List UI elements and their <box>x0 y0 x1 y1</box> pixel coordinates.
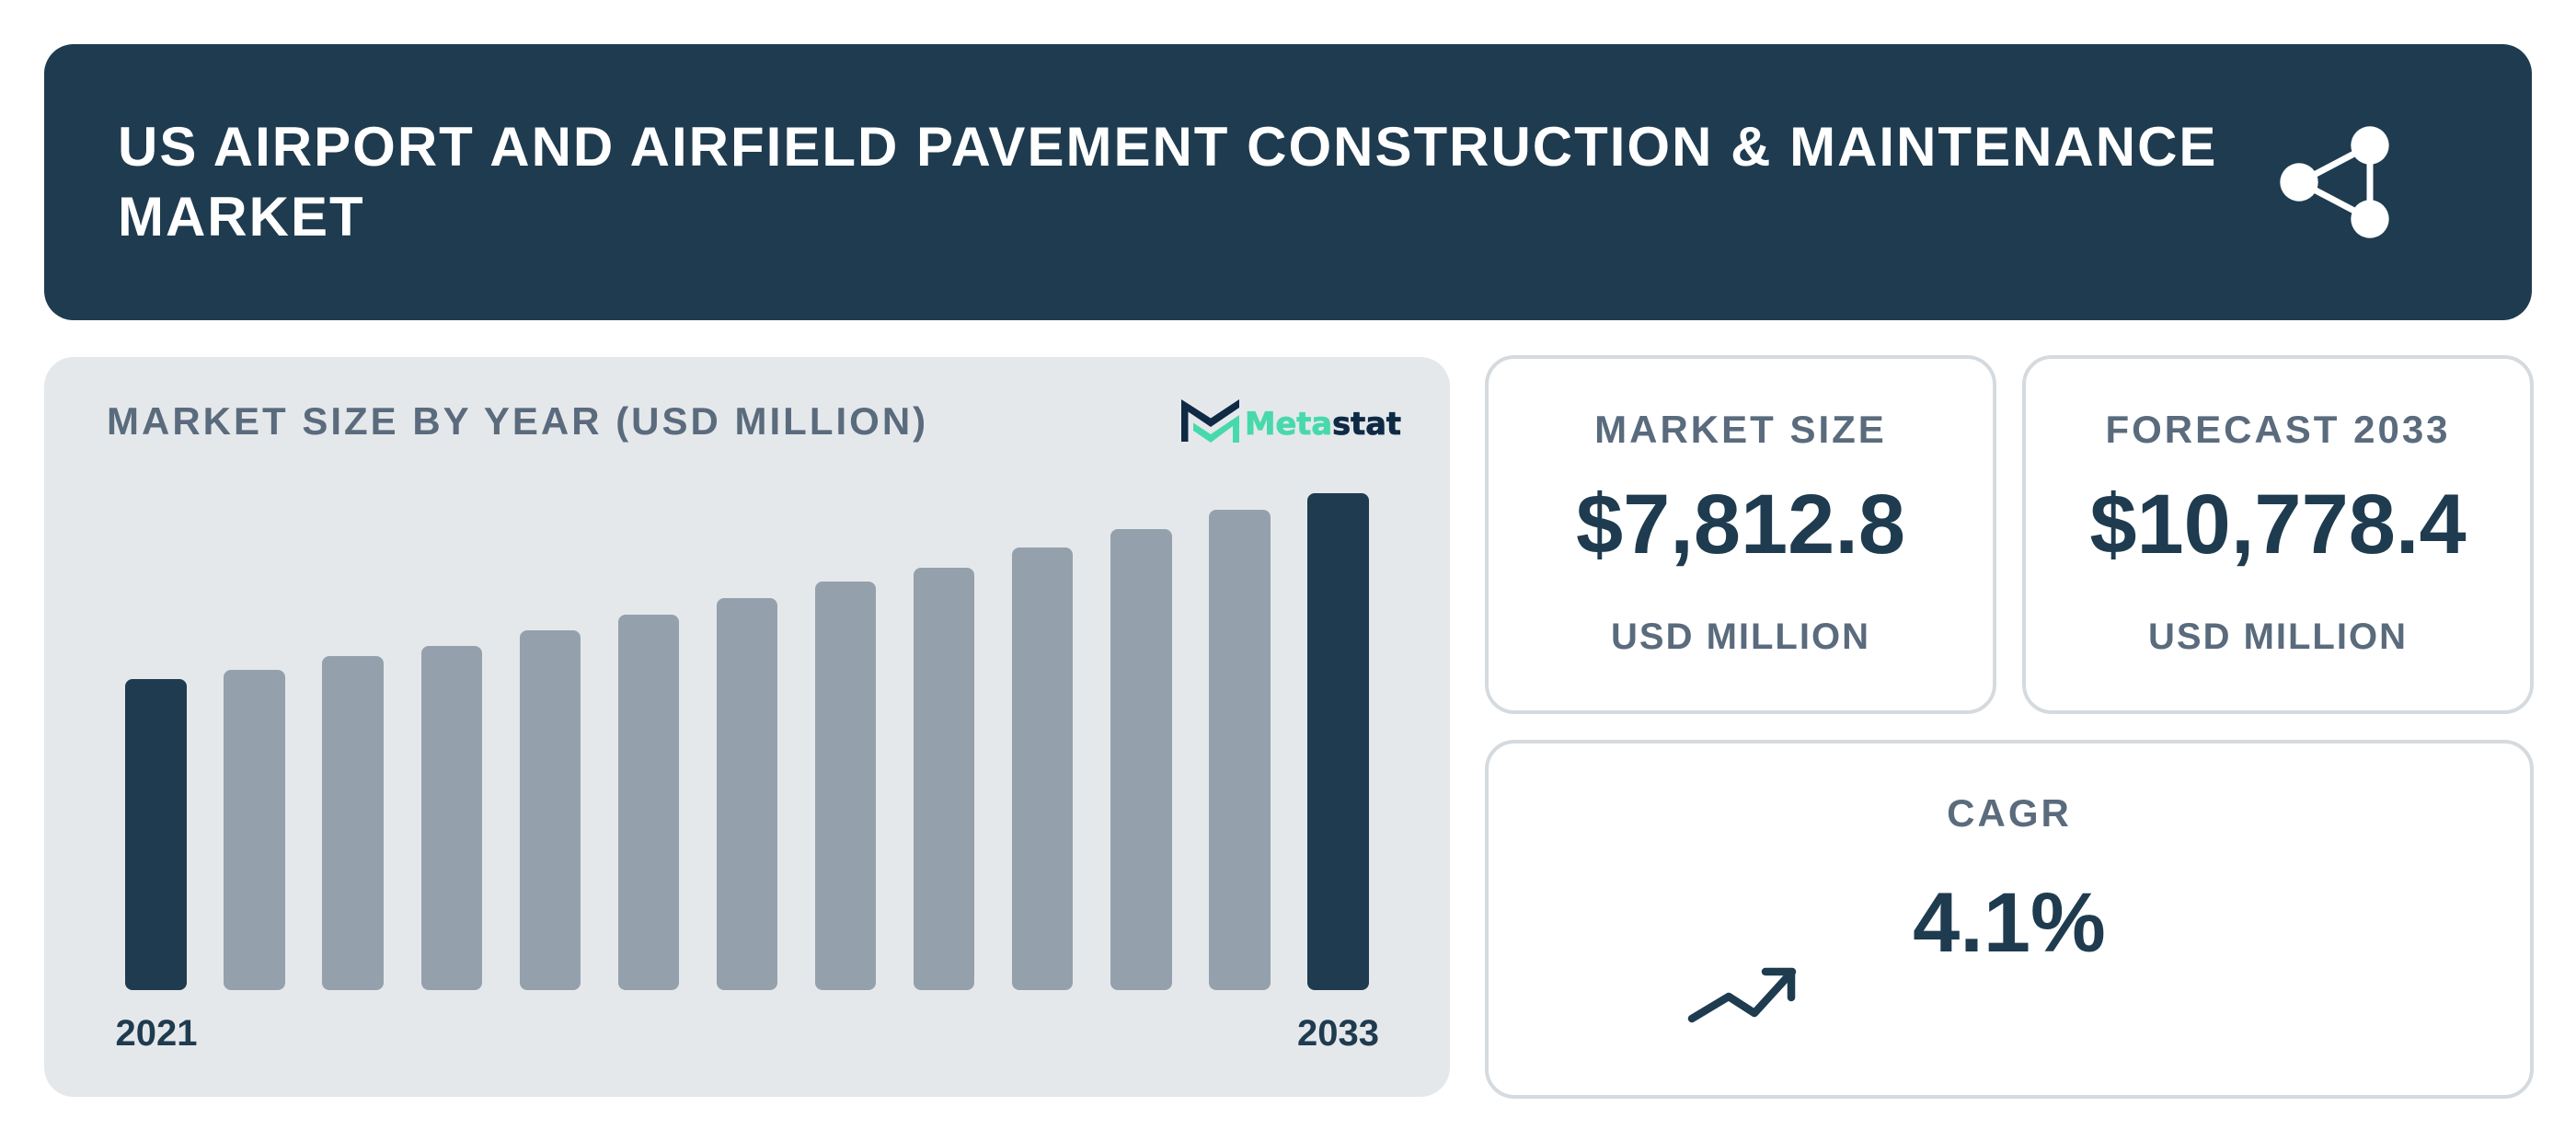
chart heading: MARKET SIZE BY YEAR (USD MILLION) <box>107 399 928 443</box>
bar 2027 <box>717 598 777 990</box>
title: US AIRPORT AND AIRFIELD PAVEMENT CONSTRUCTION & MAINTENANCE MARKET <box>118 116 2217 248</box>
label: market size: MARKET SIZE <box>1594 408 1887 451</box>
panel: market size by year <box>44 357 1450 1097</box>
panel: CAGR <box>1485 740 2534 1099</box>
value: market size: $7,812.8 <box>1576 478 1905 571</box>
bar chart <box>116 493 1379 1054</box>
bar 2028 <box>815 582 876 990</box>
bar 2025 <box>520 629 581 990</box>
unit: market size: USD MILLION <box>1611 617 1870 657</box>
value: CAGR: 4.1% <box>1913 876 2106 970</box>
bar 2024 <box>421 646 482 990</box>
bar 2030 <box>1012 547 1073 990</box>
header banner <box>44 44 2532 320</box>
bar 2031 <box>1110 529 1172 990</box>
label: 2033: 2033 <box>1297 1013 1379 1054</box>
logo: Metastat: Metastat <box>1245 406 1401 443</box>
unit: forecast 2033: USD MILLION <box>2148 617 2408 657</box>
bar 2033 <box>1307 493 1369 990</box>
bar 2029 <box>914 567 974 990</box>
icon: share network <box>2280 126 2389 238</box>
panel: market size <box>1485 355 1996 714</box>
bar 2021 <box>125 679 187 990</box>
panel: forecast 2033 <box>2022 355 2534 714</box>
bar 2022 <box>224 670 285 990</box>
label: forecast 2033: FORECAST 2033 <box>2105 408 2451 451</box>
label: CAGR: CAGR <box>1947 791 2072 835</box>
value: forecast 2033: $10,778.4 <box>2089 478 2467 571</box>
bar 2023 <box>322 656 384 990</box>
icon: trend arrow <box>1687 968 1796 1023</box>
bar 2026 <box>618 615 679 990</box>
label: 2021: 2021 <box>116 1013 197 1054</box>
bar 2032 <box>1209 510 1271 990</box>
logo: Metastat <box>1181 399 1401 443</box>
